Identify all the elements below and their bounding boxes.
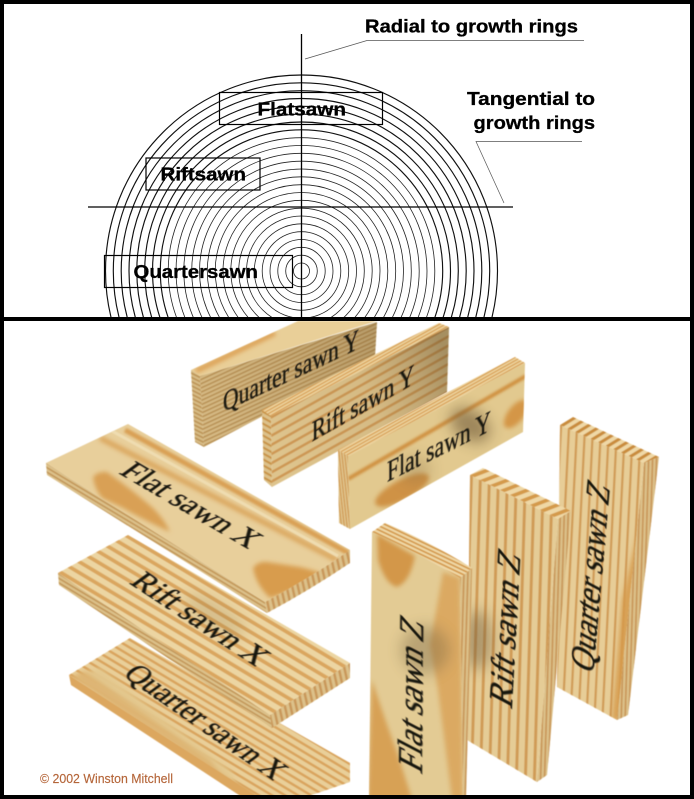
callout: tangential to growth rings: growth rings xyxy=(474,113,595,133)
box: quartersawn: Quartersawn xyxy=(134,262,258,282)
board: Flat sawn Y xyxy=(338,357,533,529)
panel: sawn boards xyxy=(4,321,690,799)
callout: radial to growth rings xyxy=(305,16,584,59)
callout: tangential to growth rings xyxy=(467,89,595,203)
board: Flat sawn Z: Flat sawn Z xyxy=(391,608,431,779)
board: Rift sawn X xyxy=(58,535,350,728)
board: Flat sawn Y: Flat sawn Y xyxy=(387,404,491,489)
board: Flat sawn X: Flat sawn X xyxy=(112,456,271,554)
callout: radial to growth rings: Radial to growth rings xyxy=(365,16,578,36)
tangential axis line xyxy=(88,206,513,208)
box: riftsawn: Riftsawn xyxy=(160,164,246,184)
box: quartersawn xyxy=(104,256,292,288)
copyright: © 2002 Winston Mitchell xyxy=(40,771,173,786)
board: Quarter sawn Z xyxy=(557,417,659,720)
board: Rift sawn X: Rift sawn X xyxy=(123,566,279,671)
box: riftsawn xyxy=(146,158,260,190)
panel: growth ring diagram xyxy=(4,4,690,317)
board: Quarter sawn Y: Quarter sawn Y xyxy=(223,324,359,418)
board: Quarter sawn Y xyxy=(191,321,377,447)
growth rings xyxy=(105,74,498,317)
board: Quarter sawn Z: Quarter sawn Z xyxy=(565,473,617,679)
box: flatsawn xyxy=(220,92,382,124)
board: Rift sawn Y xyxy=(262,323,449,487)
board: Flat sawn Z xyxy=(368,523,472,799)
board: Rift sawn Z: Rift sawn Z xyxy=(483,541,528,714)
radial axis line xyxy=(300,34,302,317)
board: Rift sawn Z xyxy=(464,468,571,782)
board: Flat sawn X xyxy=(46,424,350,613)
callout: tangential to growth rings: Tangential to xyxy=(467,89,595,109)
board: Quarter sawn X xyxy=(69,638,350,799)
board: Rift sawn Y: Rift sawn Y xyxy=(312,358,414,448)
board: Quarter sawn X: Quarter sawn X xyxy=(116,658,296,785)
box: flatsawn: Flatsawn xyxy=(258,100,346,120)
